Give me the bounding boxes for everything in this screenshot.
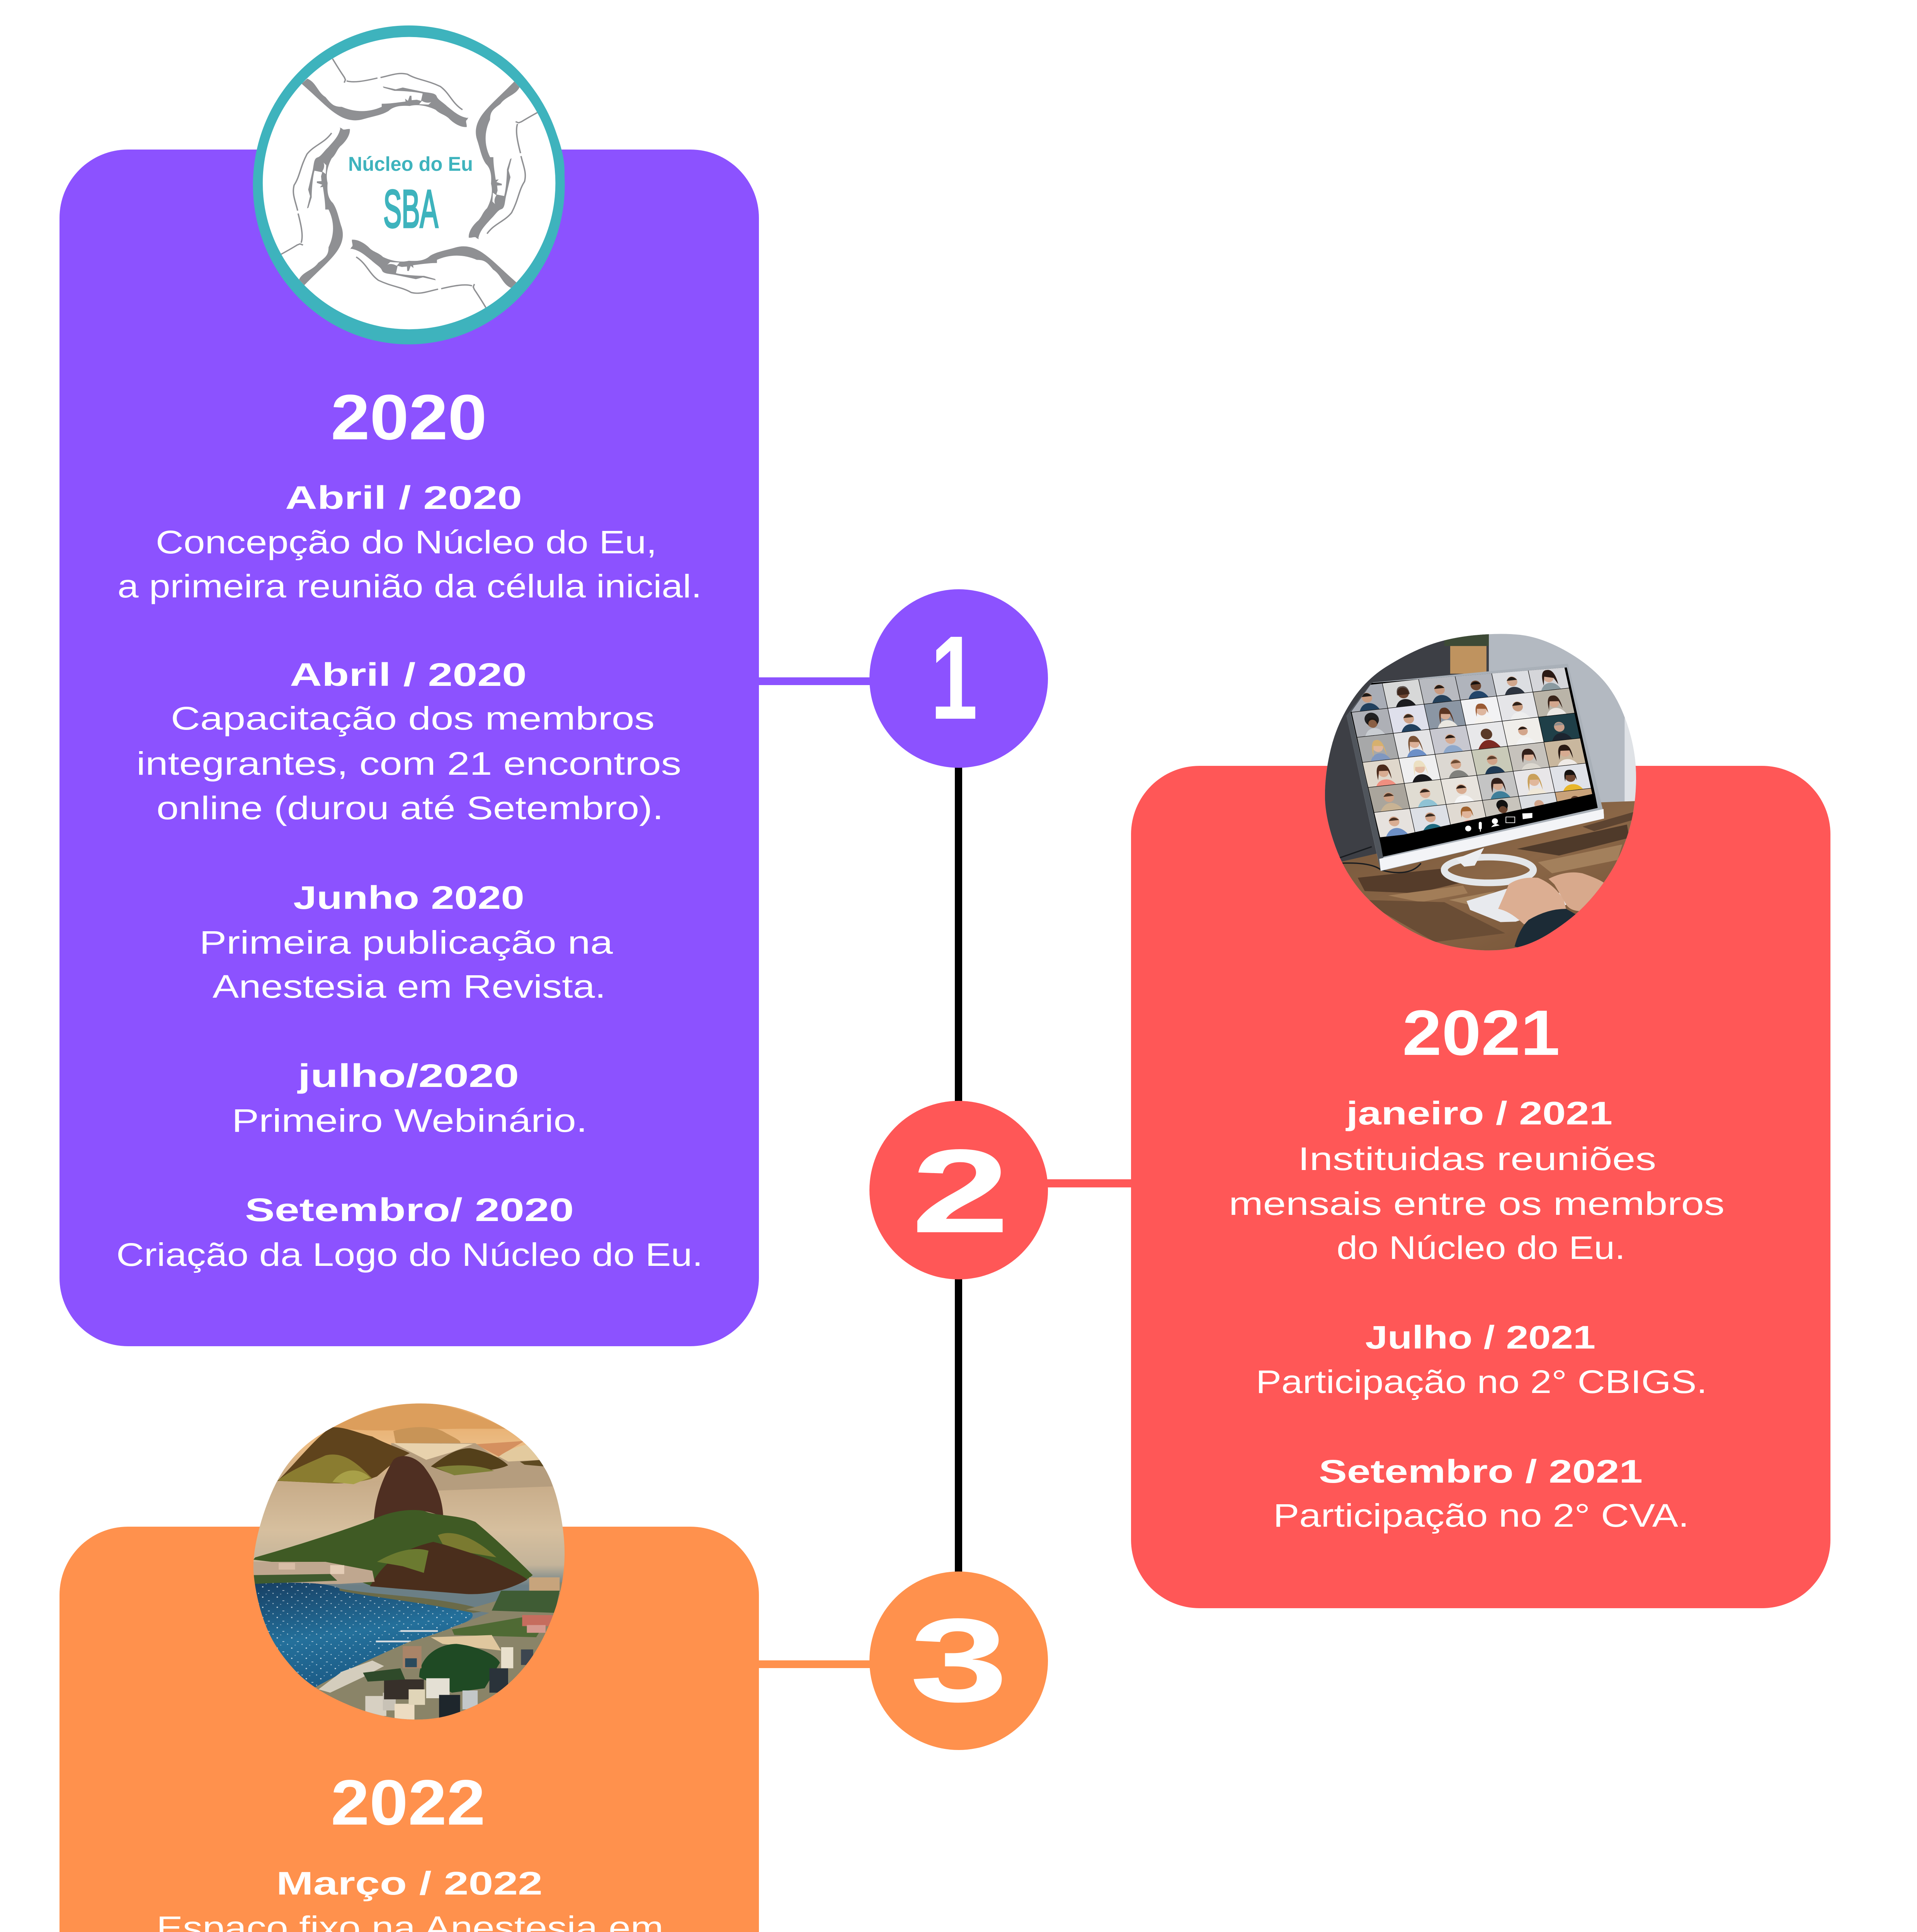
text block: Junho 2020: Anestesia em Revista. [213,968,606,1005]
year heading 2021: 2021 [1402,997,1560,1069]
text block: Setembro 2021: Participação no 2° CVA. [1273,1497,1689,1534]
text block: Julho 2021 [1256,1319,1707,1400]
logo: Núcleo do Eu SBA [253,26,565,344]
monitor [1347,664,1604,871]
text block: Setembro 2020: Criação da Logo do Núcleo do Eu. [116,1236,703,1273]
text block: Abril 2020, concepção [117,480,702,604]
number circle 2 [869,1101,1048,1279]
text block: Junho 2020 [199,879,613,1005]
text block: Junho 2020: Primeira publicação na [199,924,613,961]
number circle 2: 2 [911,1125,1010,1258]
video call tile grid [1346,663,1596,837]
text block: Abril 2020, concepção: Concepção do Núcleo do Eu, [156,524,657,560]
text block: Abril 2020, capacitação: online (durou até Setembro). [156,790,663,826]
number circle 1 [869,589,1048,768]
text block: Setembro 2020: Setembro/ 2020 [245,1192,574,1228]
year heading 2020: 2020 [331,382,487,453]
connector: panel 2020 to circle 1 [757,677,871,685]
city and lower hill [311,1577,565,1739]
Sugarloaf rock [374,1456,443,1520]
number circle 1: 1 [930,611,978,744]
panel: 2021 [1131,766,1830,1608]
panel: 2022 [60,1527,759,1932]
shore road [340,1588,489,1613]
text block: janeiro 2021: Instituidas reuniões [1298,1141,1656,1177]
text block: Setembro 2021 [1273,1453,1689,1534]
text block: Junho 2020: Junho 2020 [293,879,524,916]
text block: janeiro 2021: janeiro / 2021 [1345,1095,1613,1131]
text block: Março 2022 [117,1865,703,1932]
panel: 2020 [60,150,759,1346]
text block: julho 2020: Primeiro Webinário. [232,1102,587,1139]
text block: Abril 2020, capacitação: integrantes, com 21 encontros [136,745,681,782]
text block: janeiro 2021: mensais entre os membros [1229,1185,1725,1222]
text block: Julho 2021: Participação no 2° CBIGS. [1256,1364,1707,1400]
photo: Rio de Janeiro, Sugarloaf Mountain [232,1391,599,1739]
text block: julho 2020: julho/2020 [297,1058,519,1094]
photo: video conference on desktop monitor [1325,634,1636,951]
text block: julho 2020 [232,1058,587,1139]
text block: Setembro 2021: Setembro / 2021 [1319,1453,1643,1490]
connector: panel 2021 to circle 2 [1046,1179,1132,1187]
text block: janeiro 2021: do Núcleo do Eu. [1337,1230,1625,1266]
text block: Setembro 2020 [116,1192,703,1273]
year heading 2022: 2022 [331,1767,485,1838]
timeline vertical line [955,676,962,1662]
bottom black toolbar with icons [1380,793,1598,857]
green hill [253,1510,533,1594]
left shoreline neighbourhood [253,1562,375,1584]
connector: panel 2022 to circle 3 [757,1660,871,1668]
text block: Abril 2020, capacitação: Capacitação dos membros [171,700,655,736]
logo: Núcleo do Eu SBA: Núcleo do Eu [348,153,473,175]
text block: Abril 2020, capacitação: Abril / 2020 [290,656,527,693]
text block: Julho 2021: Julho / 2021 [1365,1319,1596,1355]
number circle 3: 3 [910,1594,1008,1727]
text block: Abril 2020, capacitação [136,656,681,826]
monitor stand [1444,848,1533,883]
text block: Março 2022: Março / 2022 [276,1865,543,1901]
text block: Abril 2020, concepção: a primeira reunião da célula inicial. [117,568,702,604]
text block: janeiro 2021 [1229,1095,1725,1266]
right hill [431,1448,544,1475]
left mountain [277,1427,410,1484]
number circle 3 [869,1571,1048,1750]
hands [1498,872,1605,951]
text block: Abril 2020, concepção: Abril / 2020 [285,480,522,516]
keyboard [1466,888,1574,922]
logo: Núcleo do Eu SBA: SBA [383,179,438,239]
bay with boats [253,1583,473,1689]
